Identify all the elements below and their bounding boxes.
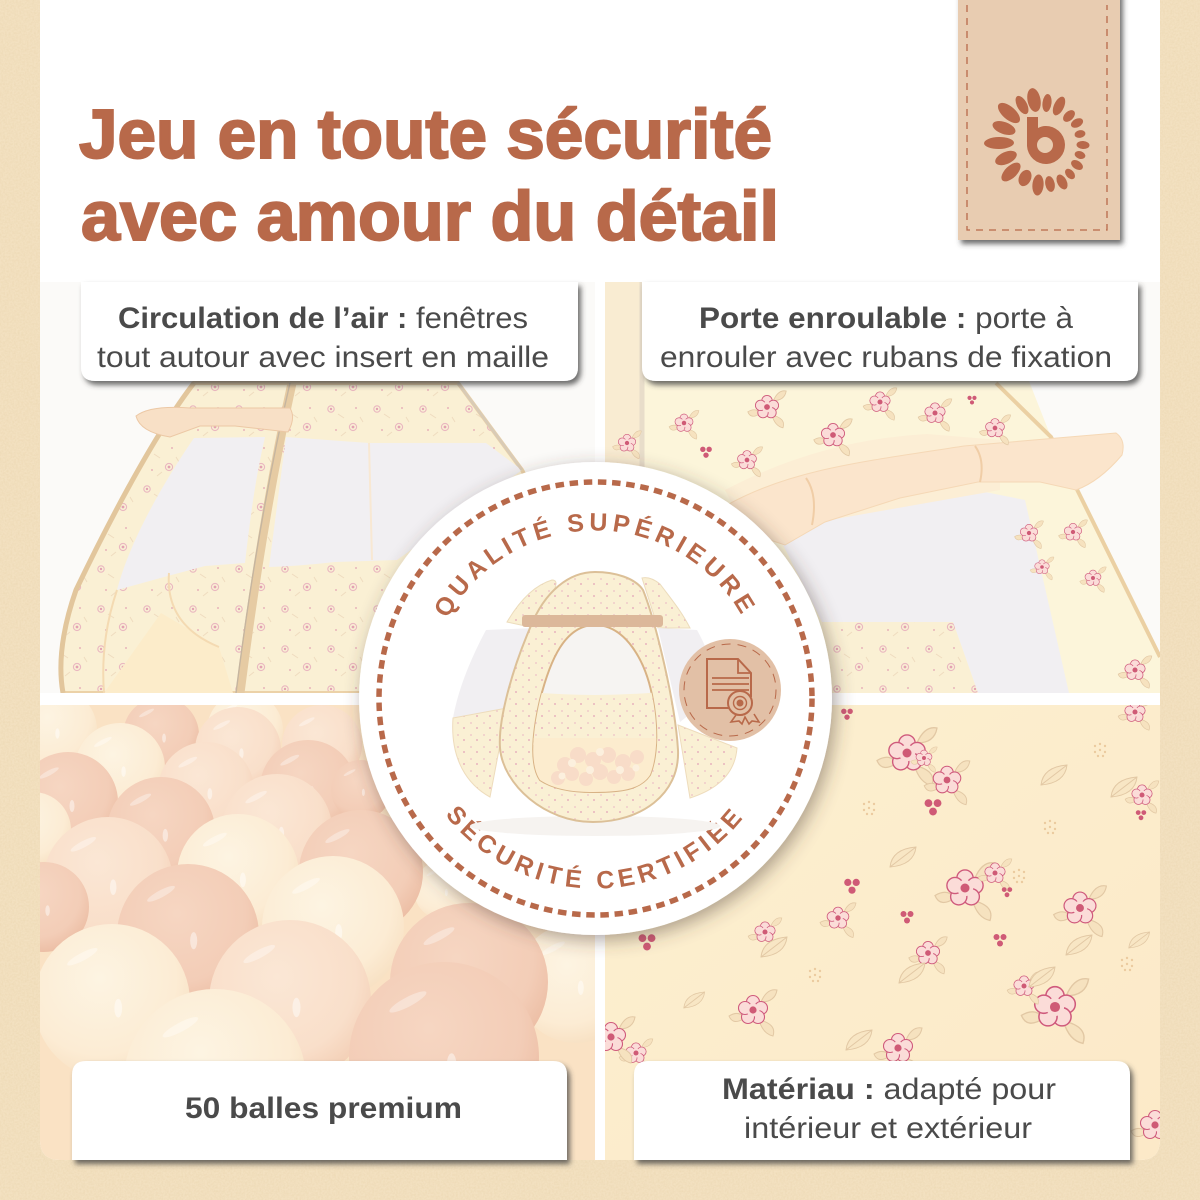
label: balls [72, 1061, 567, 1160]
wings lower [453, 708, 507, 797]
left window mesh [117, 437, 265, 590]
wing mesh [453, 628, 535, 718]
badge: quality seal [350, 454, 848, 952]
label: material: intérieur et extérieur [744, 1112, 1032, 1145]
photo: tent windows (top left) [58, 381, 526, 693]
icon: sunflower b logo [984, 87, 1090, 196]
label: rolling door: enrouler avec rubans de fixation [660, 341, 1112, 374]
roll [727, 433, 1123, 545]
tent body [63, 381, 526, 693]
floor [104, 613, 233, 693]
logo tag [958, 0, 1120, 240]
center band [500, 572, 678, 822]
lower panel [822, 622, 978, 693]
label: balls: 50 balles premium [185, 1092, 462, 1125]
label: rolling door: Porte enroulable : porte à [699, 302, 1073, 335]
label: air circulation: Circulation de l’air : fenêtres [118, 302, 528, 335]
valance [837, 490, 987, 519]
label: air circulation: tout autour avec insert en maille [97, 341, 549, 374]
small tent [453, 572, 737, 836]
badge text: top arc: QUALITÉ SUPÉRIEURE [436, 513, 756, 616]
photo: floral fabric (bottom right) [587, 698, 1179, 1160]
title [79, 95, 779, 255]
icon: certificate [679, 639, 781, 741]
badge text: bottom arc: SÉCURITÉ CERTIFIÉE [448, 806, 742, 888]
rolled door [136, 407, 293, 437]
photo: balls (bottom left) [40, 705, 595, 1160]
label: rolling door [642, 282, 1138, 381]
label: air circulation [81, 282, 578, 381]
fabric flowers [748, 391, 786, 428]
right window mesh [269, 437, 522, 567]
wings top [507, 580, 556, 628]
label: material [634, 1061, 1130, 1160]
mesh door [782, 490, 1069, 693]
title: Jeu en toute sécurité [79, 95, 772, 173]
title: avec amour du détail [81, 177, 779, 255]
door [533, 625, 656, 792]
pole [240, 383, 292, 693]
photo: rolled door (top right) [605, 282, 1160, 693]
label: material: Matériau : adapté pour [722, 1073, 1056, 1106]
tent fabric [644, 376, 1160, 693]
